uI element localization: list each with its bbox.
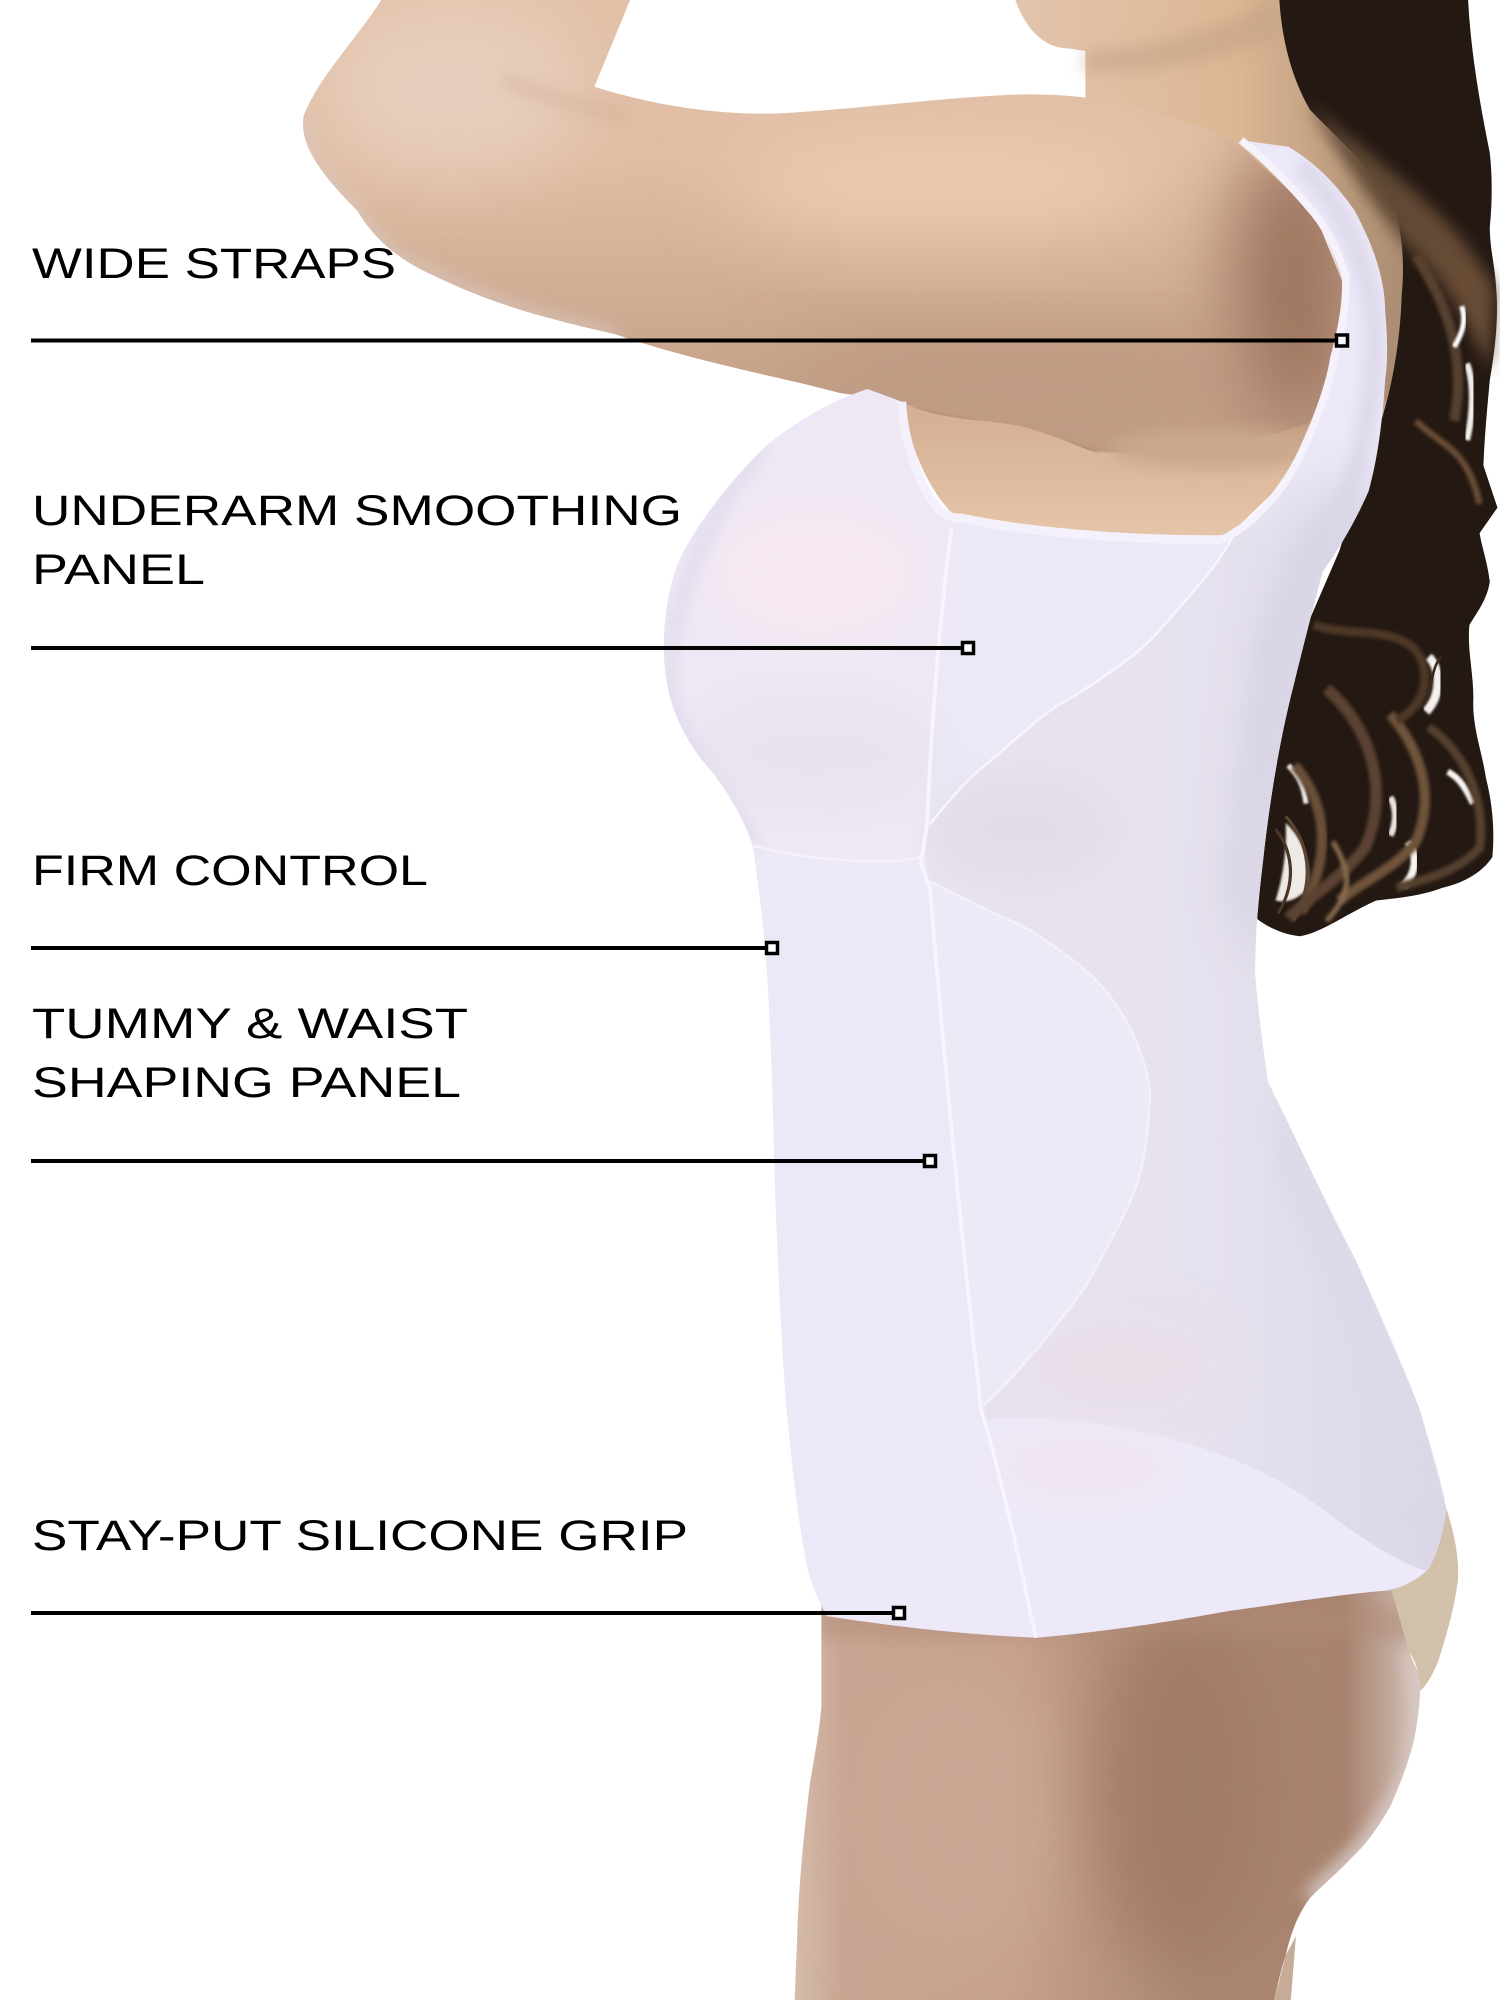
photo: woman wearing white shaping camisole, side profile: [303, 0, 1497, 2000]
leader line: [31, 646, 962, 650]
hair: [1256, 0, 1497, 936]
label: STAY-PUT SILICONE GRIP: [32, 1512, 688, 1560]
bust cup: [866, 389, 900, 402]
label second line: SHAPING PANEL: [32, 1059, 461, 1107]
lower arm shadow: [822, 327, 1170, 394]
label: WIDE STRAPS: [32, 240, 396, 288]
leader line: [31, 1159, 924, 1163]
callout: firm control: [31, 847, 778, 954]
nude brief: [1389, 1509, 1458, 1691]
chin, neck and upper back skin: [1015, 0, 1416, 421]
label: UNDERARM SMOOTHING: [32, 487, 682, 535]
marker: [1336, 335, 1348, 346]
hair upper brown band: [1307, 102, 1495, 370]
callout: tummy and waist shaping panel: [31, 1000, 936, 1166]
label: TUMMY & WAIST: [32, 1000, 468, 1048]
back sheer mesh panel: [926, 421, 1454, 1582]
forearm and elbow highlight: [319, 0, 587, 179]
marker: [766, 942, 778, 954]
forearm crease: [506, 77, 594, 108]
label second line: PANEL: [32, 546, 205, 594]
far leg sliver: [1274, 1936, 1296, 2000]
strap shading: [1301, 163, 1375, 517]
under-bust shadow: [689, 689, 944, 816]
armpit fold shadow: [918, 415, 1097, 457]
callout: stay-put silicone grip: [31, 1512, 904, 1618]
white gaps between curls: [1454, 306, 1464, 347]
raised arm: [303, 0, 1358, 469]
sheer panel darker centre: [931, 776, 1110, 883]
label: FIRM CONTROL: [32, 847, 428, 895]
hip back edge shade: [1276, 1097, 1446, 1509]
upper arm light: [757, 144, 1130, 252]
marker: [924, 1156, 936, 1166]
bust front edge shade: [669, 446, 765, 846]
elbow rim: [303, 116, 615, 334]
marker: [894, 1608, 904, 1618]
upper back shadow near hair: [1228, 513, 1354, 919]
tummy panel: [1023, 1324, 1055, 1362]
leader line: [31, 338, 1336, 342]
leader line: [31, 1611, 893, 1615]
bottom silicone hem band: [828, 1569, 1426, 1616]
white shaping camisole: [664, 140, 1454, 1638]
lower sheer pink area: [1014, 1304, 1231, 1426]
callout: wide straps: [31, 240, 1348, 346]
blend of arm into underarm: [1110, 429, 1314, 469]
armpit skin: [880, 306, 1352, 542]
callout: underarm smoothing panel: [31, 487, 974, 654]
shoulder shadow: [1231, 134, 1358, 427]
marker: [962, 642, 974, 654]
leader line: [31, 946, 766, 950]
bust pink highlight: [708, 504, 925, 644]
lower curls brown strands: [1295, 765, 1322, 912]
upper leg and hip: [795, 1582, 1429, 2000]
garment seams and binding: [754, 140, 1346, 1638]
